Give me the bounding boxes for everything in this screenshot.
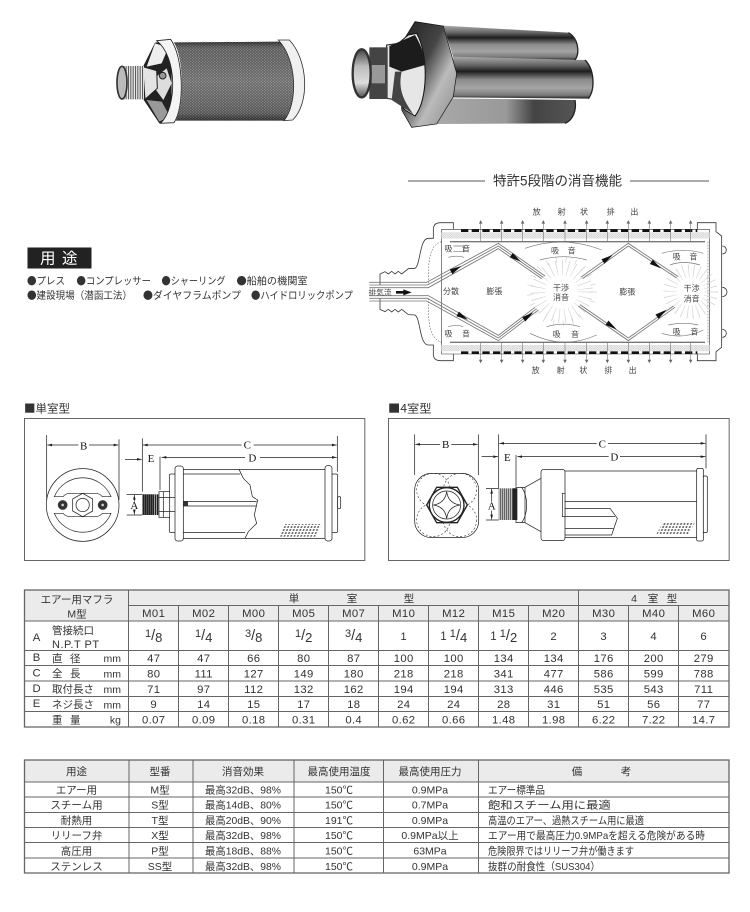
row A: port size: / [456,628,461,644]
row D: mounting length: mm [104,684,121,696]
variants rows: 耐熱用 [61,814,92,827]
row A: port size: / [351,628,356,644]
row A: port size: N.P.T PT [52,639,100,651]
row A: port size: 2 [305,630,312,645]
diagram labels: 出 [630,207,638,217]
variants rows: 最高32dB、98% [205,860,281,873]
row B: diameter: 134 [494,653,514,665]
row A: port size: 1 [295,628,301,640]
dimension lines [47,435,337,515]
diagram labels: 音 [690,327,698,337]
variants rows: 最高20dB、90% [205,814,281,827]
diagram labels: 吸 [444,244,452,253]
row C: total length: mm [104,668,121,680]
row D: mounting length: 535 [594,684,614,696]
exhaust flow lines [369,243,678,341]
variants rows: 191℃ [325,815,354,827]
dimension lines [415,434,706,520]
variants rows: 最高32dB、98% [205,784,281,796]
variants rows: ステンレス [50,861,103,873]
photo: single chamber muffler [117,39,305,123]
row C: total length: 218 [394,668,414,680]
row C: total length: 180 [344,668,364,680]
housing outline [380,223,727,361]
table header text: エアー用マフラ [41,594,113,606]
row E: thread length: 28 [497,699,510,711]
row E: thread length: 17 [297,699,310,711]
row: weight: 0.18 [242,714,265,726]
row C: total length: 149 [294,668,314,680]
label box: applications: 用 [40,250,56,268]
row C: total length: 341 [494,668,514,680]
row A: port size: 8 [155,630,162,645]
variants rows: P型 [151,844,169,858]
row B: diameter: 176 [594,653,614,665]
table header text: M型 [67,608,87,620]
list: applications: ●ハイドロリックポンプ [251,287,354,302]
row B: diameter: 134 [544,653,564,665]
diagram labels: 消音 [684,293,700,303]
row A: port size: 2 [510,630,517,645]
row C: total length: 111 [195,668,213,680]
variants rows: 抜群の耐食性（SUS304） [488,860,600,873]
variants header text [66,765,631,778]
variants rows: 63MPa [413,846,447,858]
row: weight: 重 [52,714,62,726]
table header text: 4 [631,593,637,605]
row E: thread length: 24 [397,699,410,711]
table: product variants [24,760,729,873]
variants rows: M型 [150,784,170,796]
row: weight: kg [110,714,121,726]
row: weight: 0.09 [192,714,215,726]
row B: diameter [33,652,714,665]
diagram labels: 音 [462,328,470,338]
row D: mounting length: 162 [344,684,364,696]
panel: four chamber dimension drawing: B [442,439,449,451]
diagram labels: 音 [568,246,576,256]
row B: diameter: 87 [347,653,360,665]
row A: port size: 3 [345,628,351,640]
row E: thread length: 56 [647,699,660,711]
variants header text: 型番 [150,765,171,778]
row A: port size: 8 [255,630,262,645]
radial exhaust arrows [479,221,692,363]
model row: M60 [692,608,715,620]
variants rows: リリーフ弁 [51,829,102,842]
variants rows: 0.9MPa [412,784,448,796]
row E: thread length: 9 [150,699,157,711]
list: applications: ●プレス [27,272,65,288]
diagram labels: 射 [557,365,565,375]
table header fills [24,590,729,621]
row D: mounting length: 取付長さ [52,682,94,696]
row A: port size: 管接続口 [52,624,94,637]
absorbing layers [442,231,709,353]
variants rows: エアー用 [56,784,97,796]
diagram labels: 出 [629,365,637,375]
row A: port size: 1 [450,628,456,640]
row D: mounting length: 132 [294,684,314,696]
variants rows: 最高32dB、98% [205,829,281,842]
row C: total length: 全 [52,667,63,680]
diagram labels: 放 [532,365,540,375]
row C: total length: 586 [594,668,614,680]
diagram labels: 状 [580,207,588,217]
row A: port size: / [506,628,511,644]
variants header text: 最高使用温度 [308,765,371,778]
row E: thread length: E [33,698,41,710]
row B: diameter: 47 [147,653,160,665]
panel: single chamber dimension drawing [24,418,365,560]
diagram labels: 排 [607,207,615,217]
variants rows: 150℃ [325,861,354,873]
row A: port size: 4 [650,631,657,643]
variants rows: SS型 [148,860,172,873]
cone and flange [143,40,172,123]
row E: thread length [33,698,710,712]
row A: port size: 4 [355,630,362,645]
model row: M20 [542,608,565,620]
variants rows: エアー用で最高圧力0.9MPaを超える危険がある時 [488,829,705,842]
row A: port size: 1 [490,631,500,643]
row A: port size: 1 [145,628,151,640]
variants header text: 備 [572,766,583,778]
row D: mounting length: 543 [644,684,664,696]
model row [142,608,715,620]
row B: diameter: mm [104,653,121,665]
flow arrowheads [396,253,668,332]
row A: port size: 2 [550,631,557,643]
variants rows: 0.7MPa [412,800,448,812]
panel: single chamber dimension drawing: B [80,440,87,452]
row A: port size: 4 [460,630,467,645]
row C: total length: 127 [244,668,264,680]
table grid [24,590,729,727]
row B: diameter: 直 [52,652,62,665]
list: applications: ●船舶の機関室 [236,272,308,288]
diagram: five stage muffling cross section [369,207,727,375]
end ring [278,40,305,121]
variants rows: 150℃ [325,830,354,842]
row: weight: 1.98 [542,714,565,726]
row B: diameter: 200 [644,653,664,665]
row: weight: 1.48 [492,714,515,726]
panel: single chamber dimension drawing: E [148,453,155,465]
row C: total length: 477 [544,668,564,680]
variants rows: 高温のエアー、過熱スチーム用に最適 [488,814,644,827]
variants rows: 150℃ [325,784,354,796]
variants rows: 0.9MPa [412,815,448,827]
diagram labels: 状 [579,365,587,375]
diagram labels: 吸 [553,330,561,339]
row B: diameter: 47 [197,653,210,665]
table header text [41,592,677,620]
diagram labels: 膨張 [486,286,502,296]
row E: thread length: 14 [197,699,210,711]
row: weight: 量 [70,714,81,726]
row E: thread length: 24 [447,699,460,711]
front view [415,473,479,538]
model row: M02 [192,608,215,620]
row D: mounting length: 97 [197,684,210,696]
row A: port size: 4 [205,630,212,645]
variants rows: 150℃ [325,800,354,812]
panel: four chamber dimension drawing: A [488,501,496,513]
row D: mounting length: 313 [494,684,514,696]
variants header text: 用途 [66,766,87,778]
diagram labels: 膨張 [619,287,635,297]
variants rows: 0.9MPa以上 [401,830,459,842]
row A: port size: / [251,628,256,644]
row A: port size: 1 [400,631,407,643]
side view body [499,468,707,541]
model row: M15 [492,608,515,620]
row E: thread length: 18 [347,699,360,711]
row D: mounting length: 71 [147,684,160,696]
diagram labels: 干渉 [684,283,700,293]
variants rows: エアー標準品 [488,784,545,796]
table header text: 室 [648,593,658,605]
row D: mounting length: D [32,683,41,695]
row A: port size: / [151,628,156,644]
photo: four chamber muffler [353,22,593,127]
row C: total length: C [32,668,41,680]
diagram labels: 消音 [553,292,569,302]
variants rows [50,784,705,873]
list: applications: ●建設現場（潜函工法） [27,287,132,302]
diagram labels: 吸 [673,253,681,262]
row: weight: 0.62 [392,714,415,726]
row A: port size: / [201,628,206,644]
diagram labels: 排気流 [369,287,392,297]
row C: total length: 599 [644,668,664,680]
side view body [142,466,341,541]
row B: diameter: 66 [247,653,260,665]
model row: M30 [592,608,615,620]
heading: four chamber type: ■4室型 [388,400,432,416]
model row: M12 [442,608,465,620]
interference bursts [530,260,711,324]
variants header text: 消音効果 [222,765,264,778]
row B: diameter: 100 [394,653,414,665]
heading: patent five stage muffling: 特許5段階の消音機能 [493,172,622,188]
row: weight: 0.66 [442,714,465,726]
variants rows: T型 [152,814,168,827]
model row: M07 [342,608,365,620]
row: weight: 7.22 [642,714,665,726]
row E: thread length: 77 [697,699,710,711]
diagram labels [369,207,700,375]
row C: total length [32,667,714,680]
panel: four chamber dimension drawing: D [610,452,618,464]
row E: thread length: ネジ長さ [52,699,94,711]
row A: port size: 3 [245,628,251,640]
diagram labels: 音 [571,329,579,339]
model row: M05 [292,608,315,620]
model row: M10 [392,608,415,620]
row A: port size [33,624,707,651]
row B: diameter: 80 [297,653,310,665]
row A: port size: 1 [195,628,201,640]
variants rows: 最高18dB、88% [205,844,281,858]
label box: applications: 途 [62,250,78,268]
row B: diameter: 径 [70,652,81,665]
model row: M40 [642,608,665,620]
row C: total length: 80 [147,668,160,680]
panel: four chamber dimension drawing: E [504,452,511,464]
variants rows: スチーム用 [50,800,103,812]
row C: total length: 218 [444,668,464,680]
diagram labels: 排 [604,365,612,375]
variants header text: 最高使用圧力 [398,765,462,778]
diagram labels: 吸 [444,329,452,338]
variants grid [24,760,729,873]
row A: port size: 1 [440,631,450,643]
row A: port size: A [33,632,41,644]
table header text: 型 [667,592,677,605]
fitting [143,67,157,99]
model row: M01 [142,608,165,620]
row D: mounting length: 112 [244,684,263,696]
table header text: 型 [404,592,414,605]
table header text: 単 [289,592,299,605]
absorption arcs [448,242,703,342]
diagram labels: 放 [533,207,541,217]
model row: M00 [242,608,265,620]
panel: single chamber dimension drawing: A [130,500,138,512]
row C: total length: 788 [694,668,714,680]
row: weight: 14.7 [692,714,715,726]
row E: thread length: 51 [597,699,610,711]
panel: single chamber dimension drawing: D [248,453,256,465]
diagram labels: 吸 [673,328,681,337]
heading: single chamber type: ■単室型 [24,400,70,416]
variants rows: 飽和スチーム用に最適 [488,798,611,812]
row D: mounting length: 194 [444,684,464,696]
row D: mounting length: 194 [394,684,414,696]
row B: diameter: 279 [694,653,714,665]
panel: four chamber dimension drawing: C [599,439,606,451]
variants rows: X型 [151,829,169,842]
variants header fill [24,760,729,782]
diagram labels: 音 [462,243,470,253]
row D: mounting length: 446 [544,684,564,696]
row: weight: 0.31 [292,714,315,726]
list: applications [27,272,354,302]
row: weight [52,714,715,726]
row B: diameter: B [33,652,41,664]
diagram labels: 射 [558,207,566,217]
row E: thread length: 31 [547,699,560,711]
panel: four chamber dimension drawing [388,418,729,560]
front view [46,469,119,541]
row A: port size: / [301,628,306,644]
row D: mounting length [32,682,713,696]
variants rows: 最高14dB、80% [205,798,281,812]
variants header text: 考 [621,766,631,778]
variants rows: 150℃ [325,846,354,858]
row C: total length: 長 [70,668,81,680]
list: applications: ●コンプレッサー [76,272,151,288]
panel: single chamber dimension drawing: C [244,440,251,452]
row B: diameter: 100 [444,653,464,665]
variants rows: S型 [151,798,169,812]
variants rows: 高圧用 [61,844,92,858]
diagram labels: 干渉 [553,282,569,292]
row E: thread length: mm [104,700,121,712]
row: weight: 0.07 [142,714,165,726]
row A: port size: 3 [600,631,607,643]
row E: thread length: 15 [247,699,260,711]
list: applications: ●シャーリング [162,272,226,288]
variants rows: 0.9MPa [412,861,448,873]
diagram labels: 音 [689,252,697,262]
label box: applications [28,248,92,268]
table: dimensions by model [24,590,729,727]
table header text: 室 [347,593,357,605]
diagram labels: 分散 [443,286,459,296]
mesh tube [174,42,295,121]
row D: mounting length: 711 [694,684,713,696]
row: weight: 6.22 [592,714,615,726]
row: weight: 0.4 [345,714,362,726]
list: applications: ●ダイヤフラムポンプ [143,287,242,302]
diagram labels: 吸 [551,247,559,256]
row A: port size: 1 [500,628,506,640]
row A: port size: 6 [700,631,707,643]
variants rows: 危険限界ではリリーフ弁が働きます [488,844,634,858]
